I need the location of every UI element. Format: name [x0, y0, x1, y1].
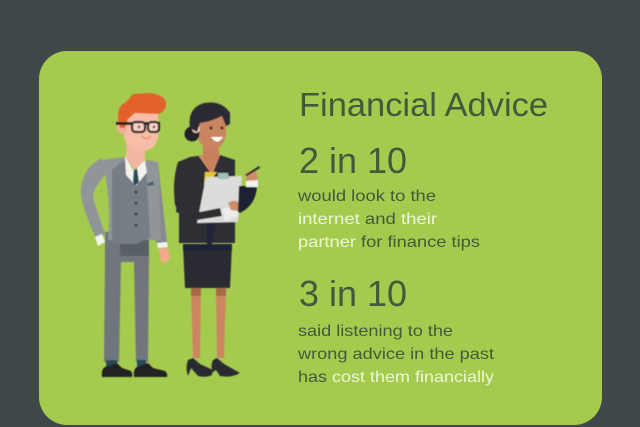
stat: 3 in 10: 3 in 10	[299, 273, 407, 314]
stat: 2 in 10: 2 in 10	[299, 140, 407, 181]
text block: wrong advice cost: wrong advice in the past	[297, 346, 495, 363]
text block: internet and partner tips	[297, 188, 480, 251]
text block: wrong advice cost: has cost them financially	[298, 369, 494, 386]
text block: wrong advice cost: said listening to the	[298, 323, 453, 340]
text block: wrong advice cost	[297, 323, 495, 386]
text block: internet and partner tips: internet and their	[298, 211, 438, 228]
heading: Financial Advice: Financial Advice	[299, 86, 548, 123]
text block: internet and partner tips: would look to the	[297, 188, 436, 205]
illustration: woman with clipboard	[174, 102, 260, 377]
panel: green card	[39, 51, 602, 425]
illustration: man in grey suit	[81, 93, 170, 377]
text block: internet and partner tips: partner for finance tips	[298, 234, 480, 251]
